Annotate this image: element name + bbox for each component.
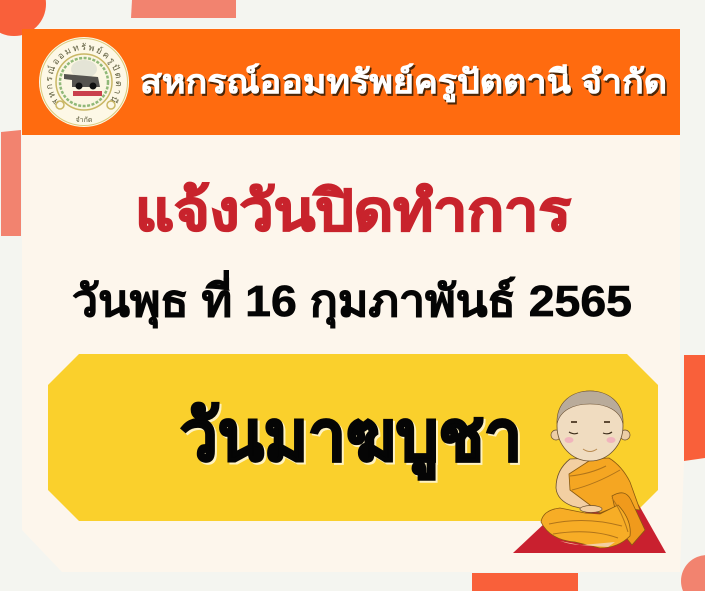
ears bbox=[551, 430, 561, 440]
decorative bar: bottom bbox=[472, 573, 578, 591]
heading: closure notice: แจ้งวันปิดทำการ bbox=[135, 179, 571, 242]
holiday name: วันมาฆบูชา bbox=[182, 399, 524, 482]
face bbox=[571, 421, 610, 423]
robe: drape bbox=[612, 493, 645, 545]
robe: crossed legs bbox=[541, 505, 630, 548]
decorative bar: left bbox=[1, 130, 21, 236]
decorative circle: top left bbox=[0, 0, 46, 36]
header banner bbox=[22, 29, 680, 135]
decorative circle: bottom right bbox=[681, 555, 705, 591]
date line: วันพุธ ที่ 16 กุมภาพันธ์ 2565 bbox=[72, 270, 632, 329]
robe: chest and shoulder bbox=[569, 458, 640, 513]
yellow holiday banner bbox=[48, 354, 658, 521]
holiday name: วันมาฆบูชา bbox=[180, 397, 522, 480]
robe folds bbox=[549, 466, 628, 538]
decorative bar: top bbox=[131, 0, 236, 18]
head bbox=[557, 391, 623, 461]
header title: สหกรณ์ออมทรัพย์ครูปัตตานี จำกัด bbox=[142, 65, 668, 105]
feet bbox=[560, 541, 615, 547]
header title: สหกรณ์ออมทรัพย์ครูปัตตานี จำกัด bbox=[140, 63, 667, 103]
icon: meditating novice monk bbox=[513, 391, 666, 553]
red mat bbox=[513, 500, 666, 553]
icon: cooperative logo: จำกัด bbox=[76, 116, 92, 124]
skin: shoulder and arm bbox=[556, 458, 610, 513]
icon: cooperative logo: สหกรณ์ออมทรัพย์ครูปัตตานี bbox=[47, 42, 121, 104]
hands bbox=[580, 506, 602, 512]
icon: cooperative logo bbox=[39, 37, 129, 127]
decorative bar: right bbox=[684, 355, 705, 461]
